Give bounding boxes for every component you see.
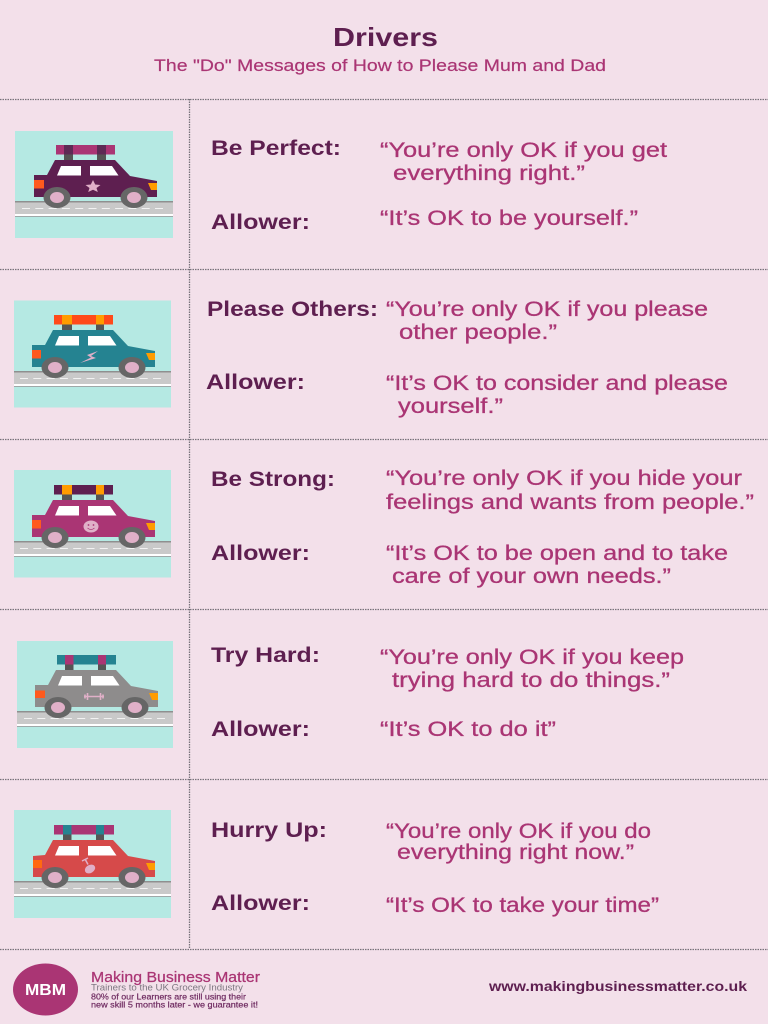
message: please others: other people.” xyxy=(399,321,557,344)
allower message: “It’s OK to take your time” xyxy=(386,894,659,917)
allower message: “It’s OK to be yourself.” xyxy=(380,207,638,230)
illustration: magenta car with smiley xyxy=(14,470,171,578)
panel: be strong xyxy=(14,467,754,588)
allower message: “It’s OK to be open and to take xyxy=(386,542,728,565)
message: be perfect: everything right.” xyxy=(393,162,585,185)
logo: MBM circle xyxy=(13,964,78,1016)
message: try hard xyxy=(380,646,684,692)
message: be perfect: “You’re only OK if you get xyxy=(380,139,667,162)
logo: MBM circle: MBM xyxy=(25,982,66,999)
allower message xyxy=(386,542,728,588)
message: hurry up: everything right now.” xyxy=(397,841,634,864)
allower label: Allower: xyxy=(211,542,310,565)
tagline: Trainers to the UK Grocery Industry xyxy=(91,982,244,992)
guarantee text xyxy=(91,992,258,1010)
message: hurry up xyxy=(386,820,651,864)
title: Drivers xyxy=(333,22,438,52)
message: hurry up: “You’re only OK if you do xyxy=(386,820,651,843)
allower label: Allower: xyxy=(206,371,305,394)
panel: be perfect xyxy=(15,131,667,238)
allower message: care of your own needs.” xyxy=(392,565,671,588)
panel: try hard xyxy=(17,641,684,748)
message: be strong: “You’re only OK if you hide your xyxy=(386,467,742,490)
allower message: “It’s OK to consider and please xyxy=(386,372,728,395)
illustration: teal car with lightning bolt xyxy=(14,300,171,408)
allower message: yourself.” xyxy=(398,395,503,418)
message: try hard: “You’re only OK if you keep xyxy=(380,646,684,669)
heading: be strong: Be Strong: xyxy=(211,468,335,491)
message: please others xyxy=(386,298,708,344)
illustration: grey car with dumbbell xyxy=(17,641,173,748)
footer xyxy=(13,964,747,1016)
subtitle: The "Do" Messages of How to Please Mum and Dad xyxy=(154,56,606,75)
heading: hurry up: Hurry Up: xyxy=(211,819,327,842)
panel: please others xyxy=(14,298,728,418)
message: please others: “You’re only OK if you please xyxy=(386,298,708,321)
message: be strong xyxy=(386,467,754,514)
allower message: “It’s OK to do it” xyxy=(380,718,556,741)
message: try hard: trying hard to do things.” xyxy=(392,669,670,692)
allower label: Allower: xyxy=(211,211,310,234)
allower label: Allower: xyxy=(211,892,310,915)
panel: hurry up xyxy=(14,810,659,918)
message: be perfect xyxy=(380,139,667,185)
heading: be perfect: Be Perfect: xyxy=(211,137,341,160)
website url: www.makingbusinessmatter.co.uk xyxy=(488,978,747,994)
heading: try hard: Try Hard: xyxy=(211,644,320,667)
company name: Making Business Matter xyxy=(91,969,260,986)
guarantee text: new skill 5 months later - we guarantee it! xyxy=(91,1000,258,1010)
header: title and subtitle xyxy=(154,22,606,75)
allower message xyxy=(386,372,728,418)
allower label: Allower: xyxy=(211,718,310,741)
heading: please others: Please Others: xyxy=(207,298,378,321)
illustration: purple car with star xyxy=(15,131,173,238)
guarantee text: 80% of our Learners are still using their xyxy=(91,992,246,1002)
illustration: red car with stopwatch xyxy=(14,810,171,918)
message: be strong: feelings and wants from people.” xyxy=(386,491,754,514)
